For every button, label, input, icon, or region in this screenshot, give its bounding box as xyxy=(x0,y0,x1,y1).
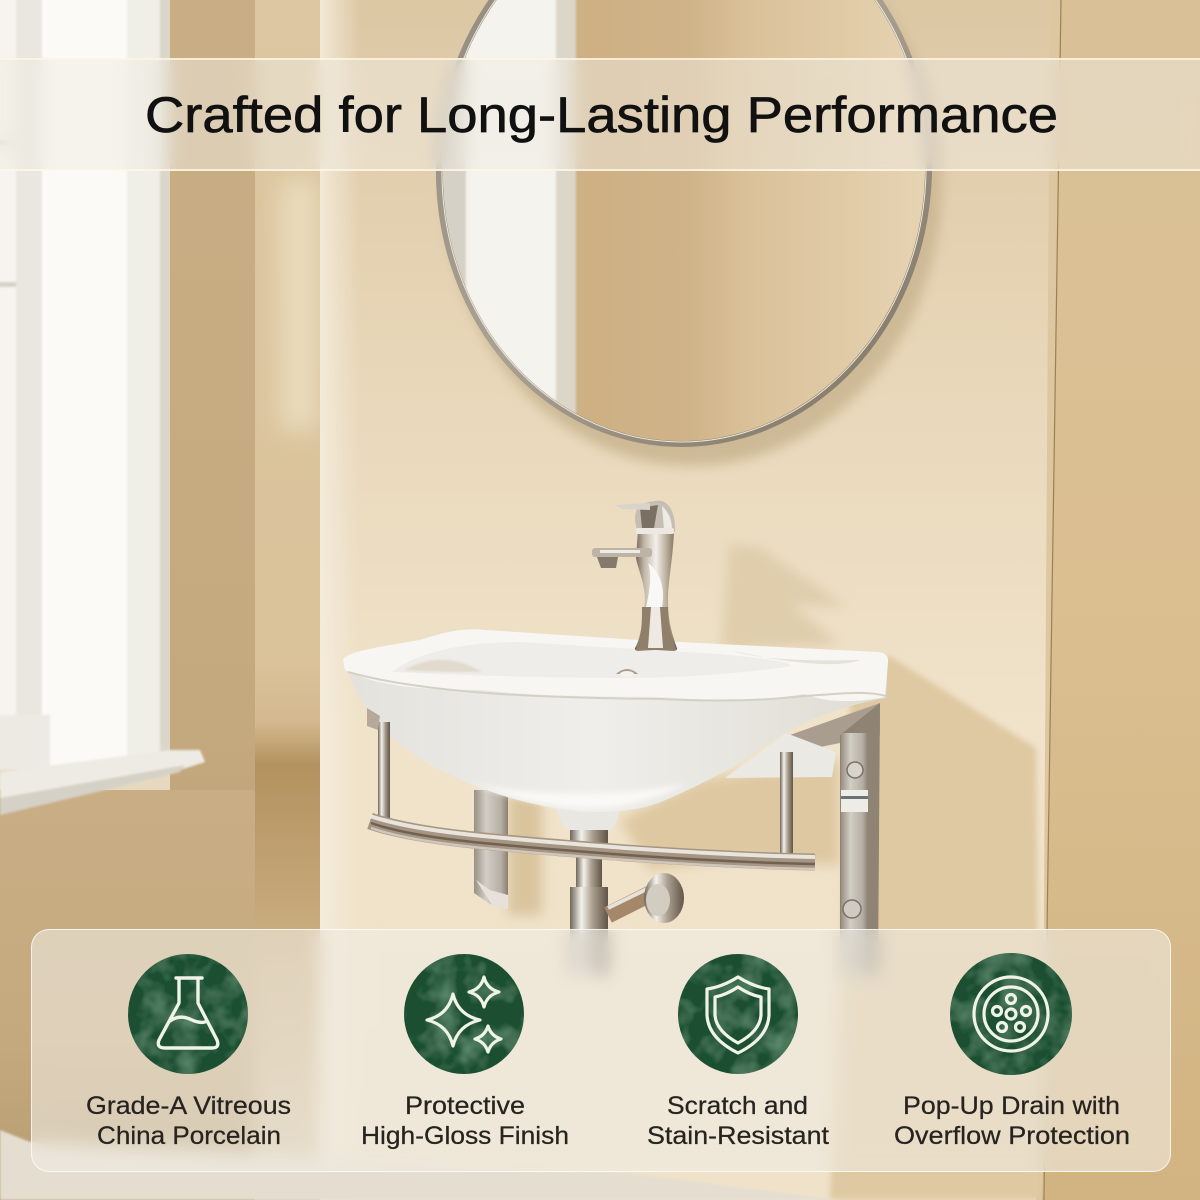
sink drain neck xyxy=(556,808,620,852)
label: Grade-A Vitreous xyxy=(86,1092,291,1120)
label: Stain-Resistant xyxy=(647,1122,829,1150)
label: China Porcelain xyxy=(97,1122,281,1150)
label xyxy=(86,1092,291,1150)
window sill xyxy=(0,750,205,815)
feature: Scratch and Stain-Resistant xyxy=(647,954,829,1150)
panel edge xyxy=(1036,0,1061,1200)
round mirror xyxy=(424,0,950,460)
icon: shield xyxy=(678,954,798,1074)
icon: sparkles xyxy=(404,954,524,1074)
label: Protective xyxy=(405,1092,525,1120)
towel bar with rods xyxy=(367,708,815,869)
bottom feature panel xyxy=(31,929,1171,1172)
label: Overflow Protection xyxy=(894,1122,1130,1150)
title: Crafted for Long-Lasting Performance xyxy=(145,87,1058,143)
feature: Grade-A Vitreous China Porcelain xyxy=(86,954,291,1150)
right wall xyxy=(1042,0,1200,1200)
label xyxy=(894,1092,1130,1150)
label: Pop-Up Drain with xyxy=(903,1092,1120,1120)
label: High-Gloss Finish xyxy=(361,1122,569,1150)
icon: drain xyxy=(950,953,1072,1075)
feature: Pop-Up Drain with Overflow Protection xyxy=(894,953,1130,1150)
label xyxy=(361,1092,569,1150)
title band xyxy=(0,58,1200,171)
label xyxy=(647,1092,829,1150)
light strip beside wall panel xyxy=(255,0,323,1200)
floor xyxy=(0,1130,840,1200)
left wall bracket xyxy=(474,790,508,910)
wall shadows xyxy=(508,544,1040,1200)
wall panel xyxy=(320,0,1055,1200)
mirror shadow xyxy=(434,0,954,477)
sink xyxy=(343,629,888,812)
left wall xyxy=(170,0,258,1200)
drain trap and pipe xyxy=(570,850,684,975)
feature: Protective High-Gloss Finish xyxy=(361,954,569,1150)
back plate xyxy=(725,733,836,778)
label: Scratch and xyxy=(667,1092,808,1120)
window xyxy=(0,0,171,770)
faucet xyxy=(592,501,677,651)
right metal frame and leg xyxy=(790,703,880,975)
icon: flask xyxy=(128,954,248,1074)
